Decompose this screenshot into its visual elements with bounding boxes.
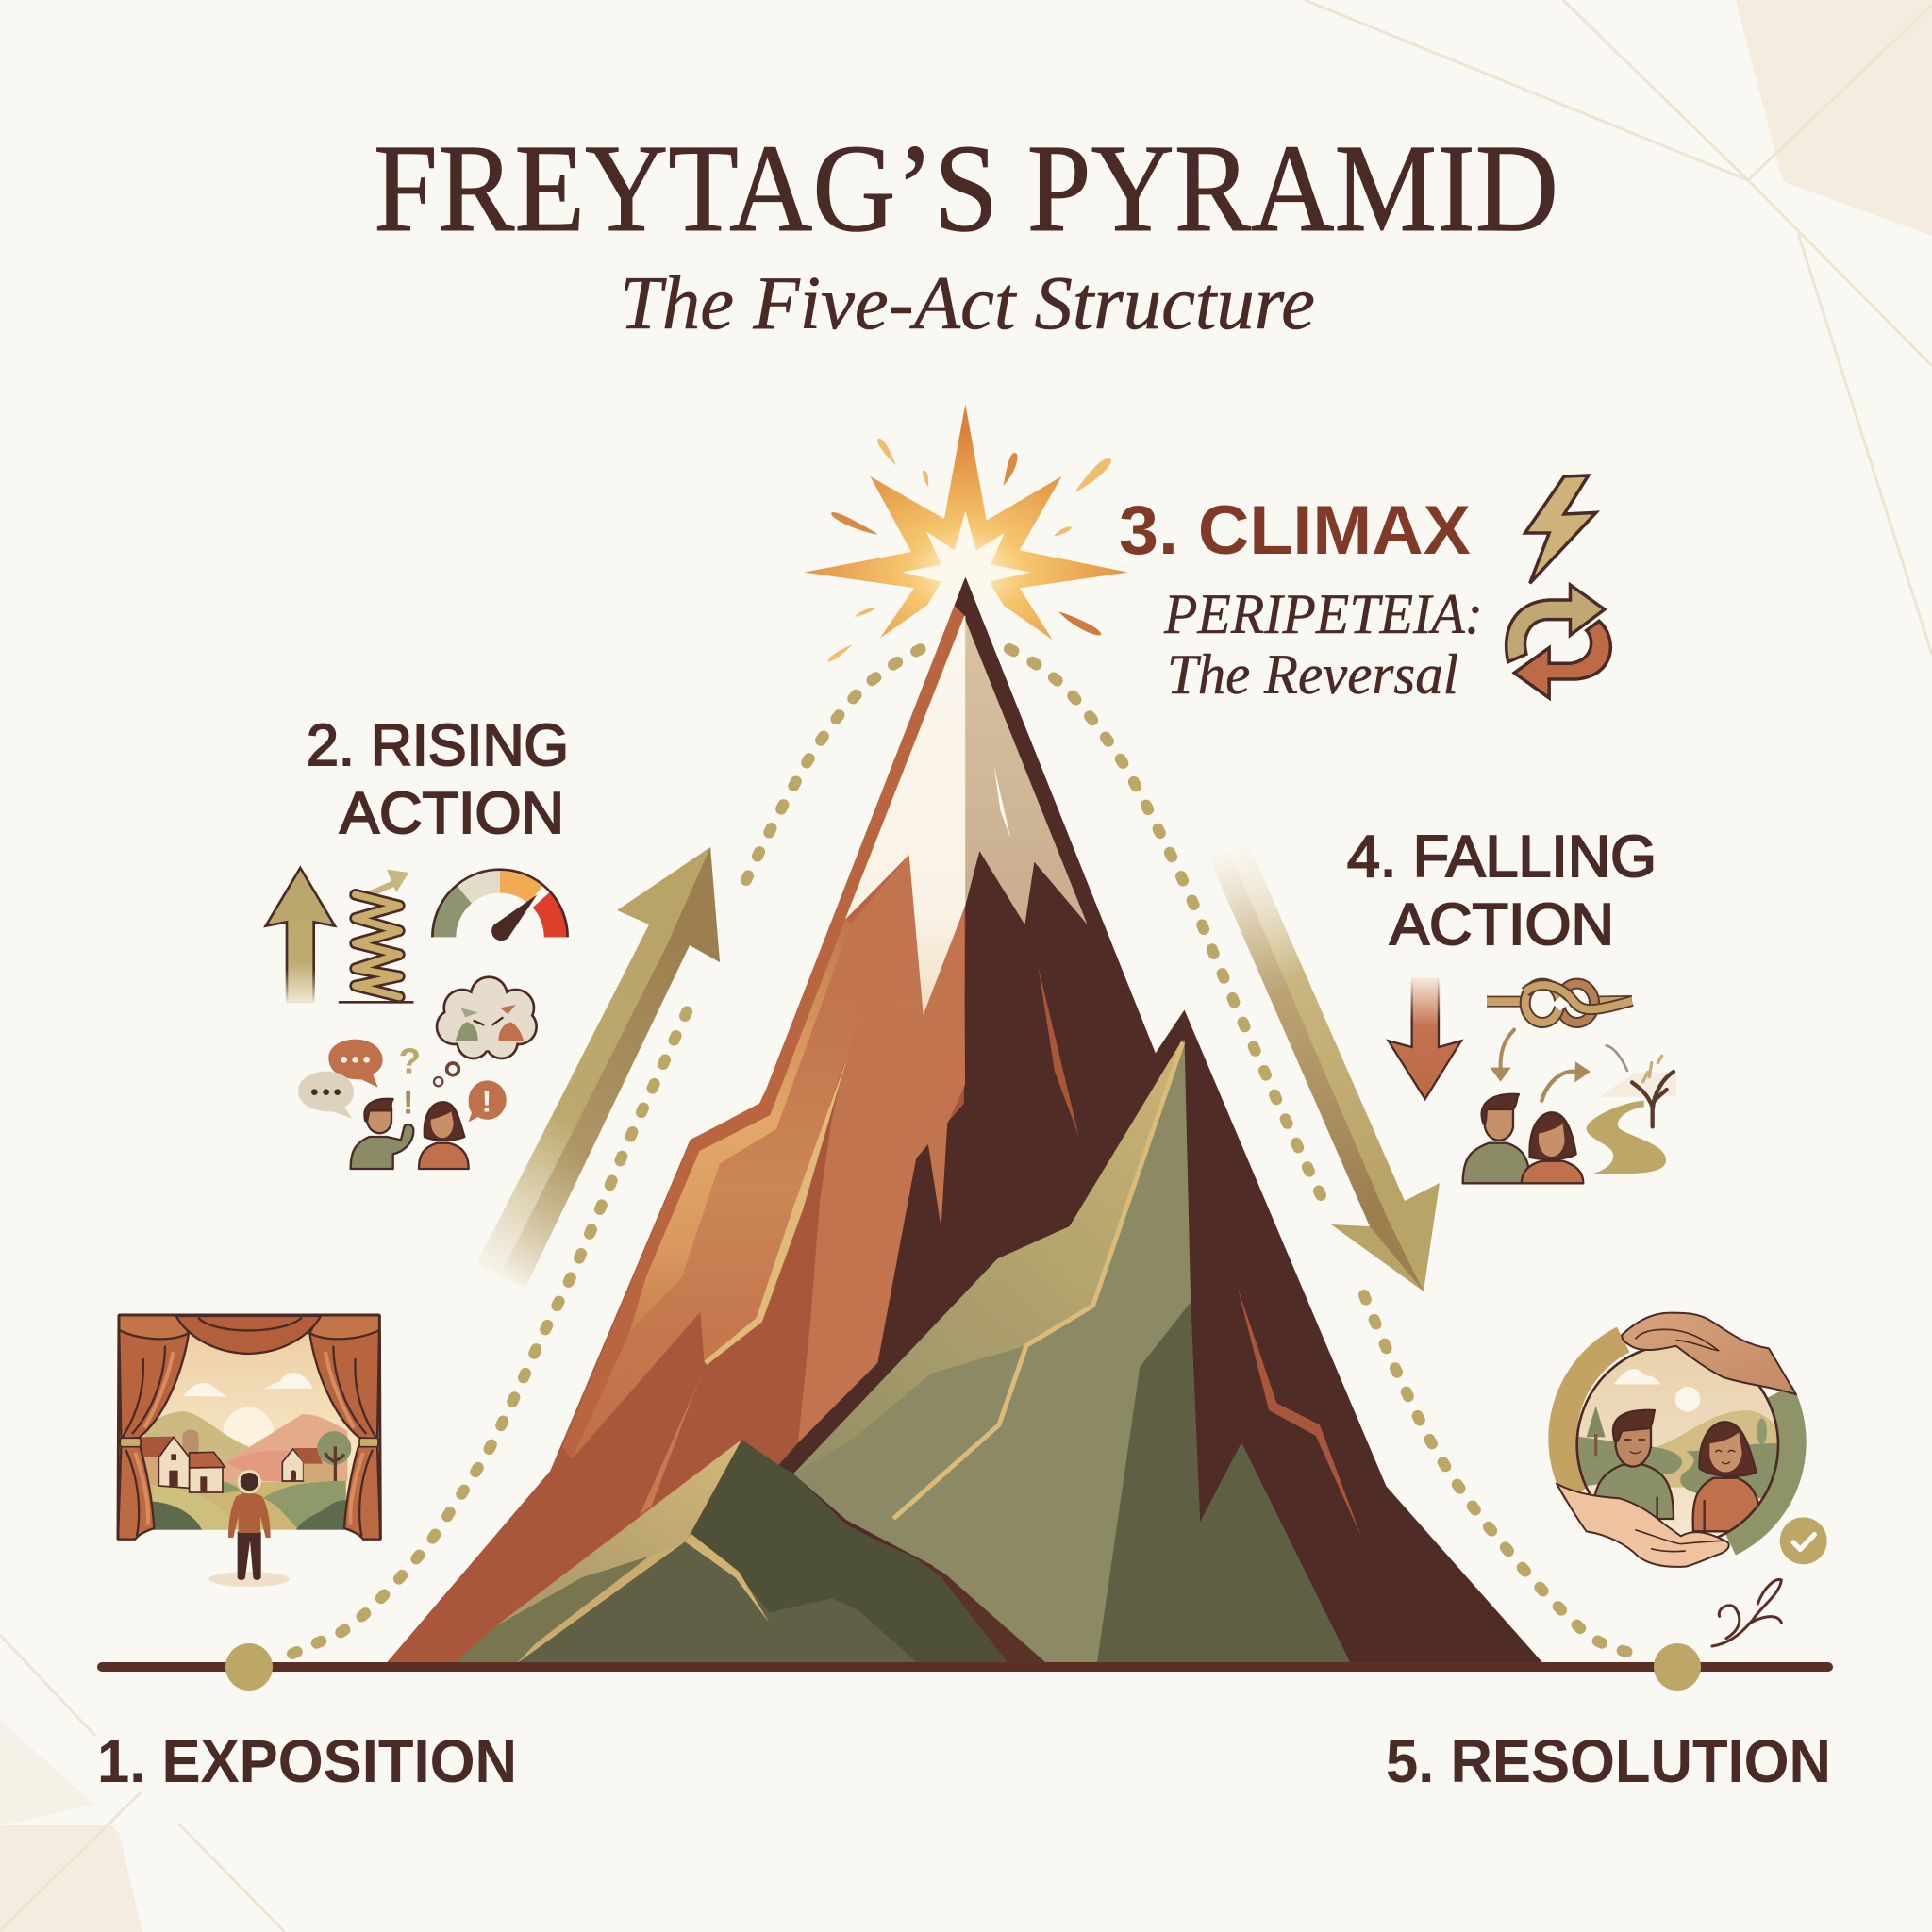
arrow: rising action — [476, 847, 720, 1288]
label: 5. resolution: 5. RESOLUTION — [1386, 1727, 1831, 1795]
icon: broken branch and tree — [1599, 1045, 1676, 1126]
icon: woman — [419, 1102, 469, 1169]
mountain: central face — [798, 905, 965, 1442]
resolution scene — [1557, 1313, 1827, 1646]
icon: tension gauge — [432, 870, 568, 941]
label: the reversal: The Reversal — [1167, 643, 1458, 706]
mountain: front dark peak — [517, 1440, 1008, 1664]
marker: start of story — [225, 1643, 273, 1690]
scene: hills — [144, 1411, 347, 1530]
mountain: green middle ridge — [793, 1039, 1351, 1664]
icon: man — [1463, 1094, 1530, 1183]
label: 3. climax: 3. CLIMAX — [1119, 492, 1471, 569]
mountain: left rim — [760, 576, 965, 1108]
scene: sun — [224, 1407, 274, 1457]
mountain: gold crack right — [893, 1042, 1183, 1519]
mountain: front lower slope — [517, 1541, 919, 1664]
scene: left curtain — [118, 1315, 189, 1540]
background decoration: bottom left facets — [0, 1635, 285, 1932]
icon: thought dots — [434, 1063, 458, 1086]
icon: thought cloud — [436, 975, 538, 1059]
background decoration: top right facets — [1305, 0, 1932, 655]
scene: right curtain — [309, 1315, 380, 1540]
icon: alert bubble: ! — [482, 1083, 491, 1118]
icon: winding path — [1587, 1101, 1666, 1174]
icon: question and exclamation marks — [399, 1041, 421, 1122]
ring: green arc — [1729, 1391, 1792, 1542]
icon: woman — [1522, 1112, 1583, 1183]
star: sparks — [828, 439, 1111, 662]
label: 2. rising: 2. RISING — [307, 713, 569, 778]
mountain: rim shoulder — [562, 855, 923, 1459]
scene: person viewing stage — [208, 1470, 290, 1587]
icon: spring — [340, 870, 412, 1002]
icon: upper hand — [1622, 1313, 1796, 1394]
baseline — [102, 1662, 1828, 1672]
mountain: rust streak upper — [1039, 967, 1079, 1136]
marker: end of story — [1654, 1643, 1701, 1690]
mountain: tan ridge facet — [793, 1039, 1183, 1474]
scene: houses — [139, 1430, 333, 1492]
exposition scene: stage and village — [118, 1315, 380, 1587]
label: action (rising): ACTION — [340, 781, 564, 846]
vignette outline — [1577, 1344, 1778, 1545]
icon: knot — [1487, 984, 1632, 1023]
title: FREYTAG’S PYRAMID — [374, 118, 1558, 258]
vignette: sky — [1577, 1344, 1778, 1545]
mountain: rust left base — [385, 576, 965, 1664]
label: action (falling): ACTION — [1390, 892, 1614, 958]
mountain: dark green right facet — [1097, 1302, 1351, 1664]
mountain: gold crack left — [705, 1057, 848, 1365]
mountain: back silhouette — [385, 576, 1544, 1664]
subtitle: The Five-Act Structure — [620, 262, 1315, 345]
label: 1. exposition: 1. EXPOSITION — [97, 1727, 517, 1795]
mountain: front gold crack — [685, 1534, 769, 1623]
icon: curved arrows — [1490, 1030, 1591, 1101]
icon: speech bubbles — [298, 1040, 383, 1119]
mountain: rust streak lower — [1238, 1288, 1361, 1537]
mountain: front mid olive — [454, 1557, 649, 1664]
mountain: front gold strip — [517, 1541, 685, 1664]
dotted story curve: rising — [292, 649, 921, 1654]
mountain: front foothill — [454, 1440, 1047, 1664]
icon: alert bubble — [469, 1080, 507, 1122]
mountain: snow and upper right — [793, 613, 1361, 1664]
mountain: lower lit strip — [640, 1369, 705, 1516]
label: 4. falling: 4. FALLING — [1347, 824, 1657, 890]
vignette: woman — [1693, 1422, 1761, 1531]
icon: down arrow — [1389, 978, 1461, 1099]
mountain: front brown edge — [846, 1524, 1047, 1664]
vignette: man — [1592, 1410, 1674, 1519]
icon: sprig — [1712, 1579, 1781, 1646]
icon: lower hand — [1557, 1484, 1729, 1567]
mountain: snow cap left — [845, 613, 965, 1015]
mountain: left faces — [562, 855, 965, 1516]
climax starburst — [804, 404, 1128, 662]
mountain: lit mid tone — [572, 855, 923, 1459]
scene: clouds — [182, 1373, 313, 1397]
mountain: dark right face — [768, 576, 1544, 1664]
mountain: light band — [629, 920, 851, 1332]
mountain: snow highlight — [993, 764, 1010, 839]
mountain — [385, 576, 1544, 1664]
icon: lightning bolt — [1525, 475, 1596, 583]
mountain: front tan slope — [495, 1440, 741, 1627]
mountain: snow cap right — [965, 620, 1088, 924]
reversal: rust arrow — [1514, 621, 1610, 698]
icon: check badge — [1780, 1517, 1827, 1564]
dotted story curve: falling — [1009, 649, 1635, 1654]
icon: man gesturing — [351, 1099, 413, 1169]
circular vignette — [1577, 1344, 1780, 1545]
falling action icons — [1389, 978, 1676, 1183]
icon: question and exclamation marks: ? — [399, 1041, 421, 1081]
reversal: gold arrow — [1507, 585, 1605, 662]
star: outer burst — [804, 404, 1128, 640]
label: peripeteia: PERIPETEIA: — [1163, 583, 1483, 645]
arrow: falling action — [1208, 847, 1440, 1291]
vignette: cloud and sun — [1613, 1369, 1700, 1412]
scene: tree — [317, 1431, 351, 1481]
mountain tip over star — [955, 576, 978, 617]
icon: up arrow — [266, 868, 335, 1003]
vignette: landscape — [1577, 1406, 1780, 1500]
icon: question and exclamation marks: ! — [403, 1085, 413, 1122]
ring: gold arc — [1562, 1340, 1624, 1493]
star: white core — [902, 511, 1030, 607]
scene: valance — [118, 1315, 380, 1540]
rising action icons — [266, 868, 568, 1169]
icon: reversal arrows — [1507, 585, 1610, 698]
scene: sky — [132, 1324, 365, 1530]
